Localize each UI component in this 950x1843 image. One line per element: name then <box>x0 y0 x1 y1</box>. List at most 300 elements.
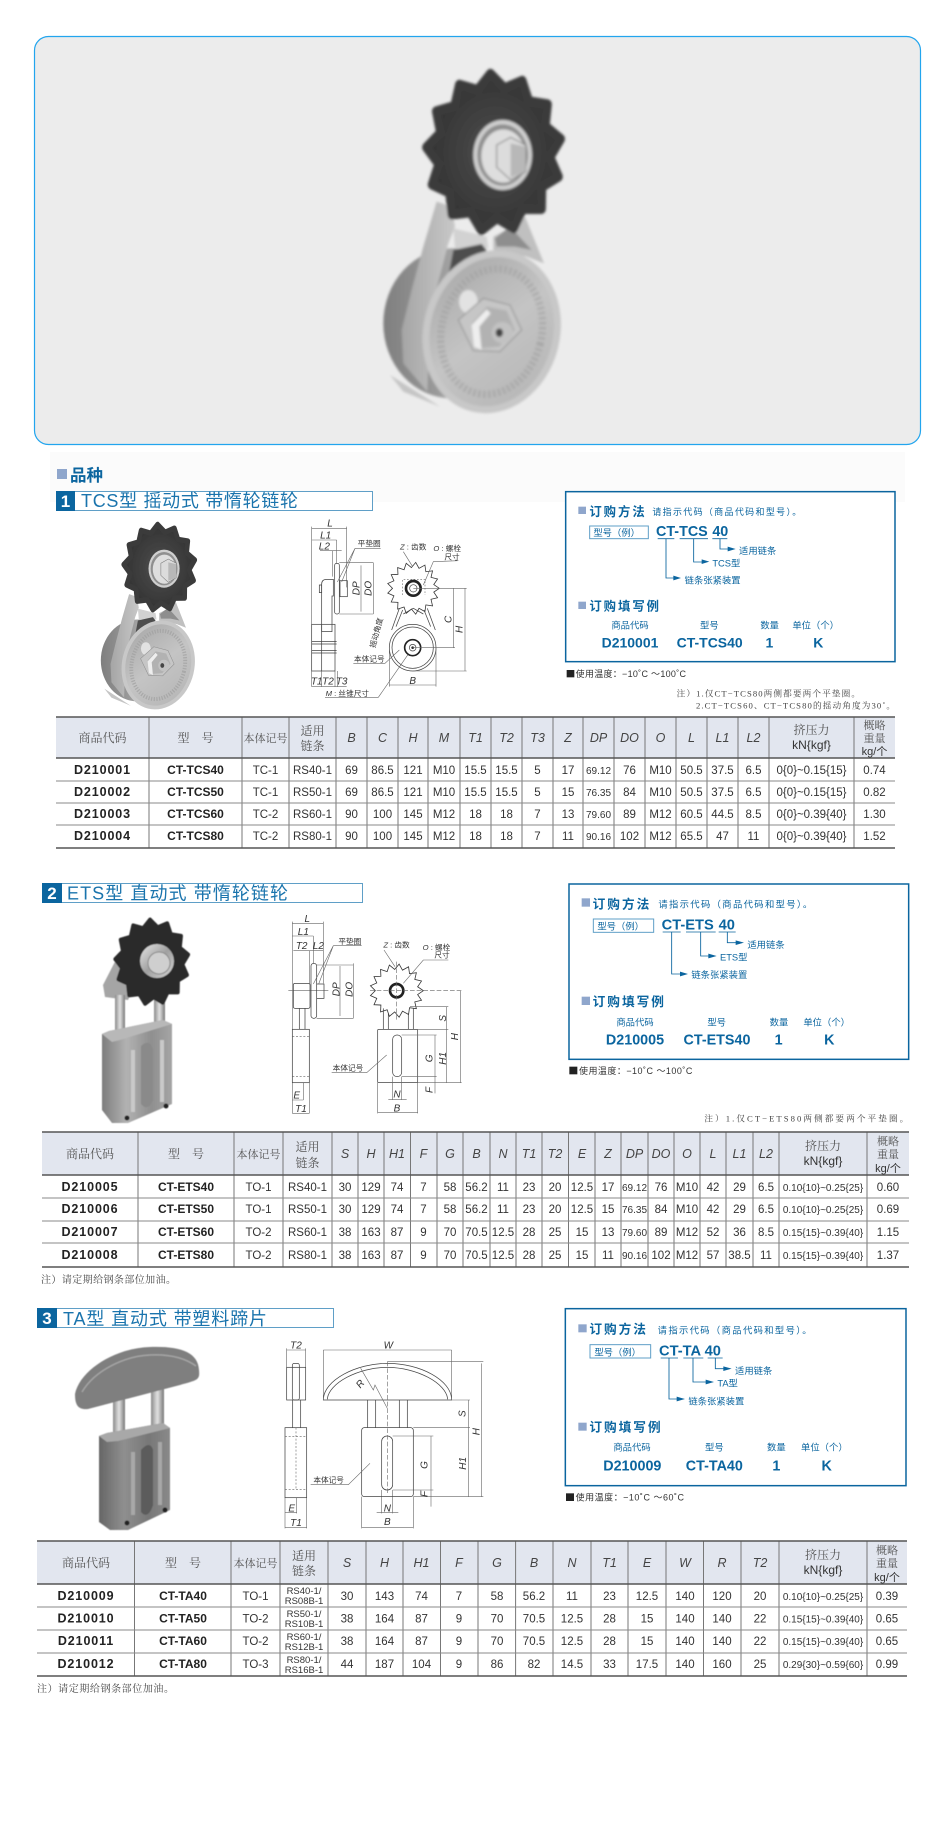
table rows: 25 <box>549 1227 561 1239</box>
table rows: 86.5 <box>371 765 394 777</box>
table rows: TO-1 <box>246 1182 272 1194</box>
table header: H <box>380 1556 390 1570</box>
table rows: TC-2 <box>253 831 278 843</box>
table rows: M12 <box>433 809 455 821</box>
table rows: 7 <box>456 1591 462 1603</box>
drawing: ETS dimensions: N <box>393 1090 401 1101</box>
panel: TCS ordering: 单位（个） <box>792 620 839 631</box>
table: TA specifications <box>37 1541 907 1676</box>
table rows: 25 <box>549 1250 561 1262</box>
table header: N <box>567 1556 577 1570</box>
table rows: 17 <box>562 765 574 777</box>
table rows: 56.2 <box>465 1204 488 1216</box>
table rows: 74 <box>415 1591 428 1603</box>
table rows: 58 <box>444 1182 456 1194</box>
table header: H1 <box>414 1556 429 1570</box>
table header: 本体记号 <box>244 731 288 745</box>
panel: ETS ordering: 1 <box>775 1032 783 1048</box>
table rows: 42 <box>707 1204 719 1216</box>
table rows: 23 <box>523 1204 535 1216</box>
panel: TA ordering: 型号（例） <box>594 1346 641 1357</box>
table header: T1 <box>602 1556 617 1570</box>
panel: TA ordering: 数量 <box>767 1442 786 1453</box>
table rows: 140 <box>675 1614 695 1626</box>
panel: TA ordering: CT-TA <box>659 1344 701 1360</box>
table header: B <box>472 1147 481 1161</box>
table rows: 8.5 <box>746 809 762 821</box>
drawing: ETS dimensions: T2 <box>296 941 308 952</box>
panel: ETS ordering: 订购方法 <box>593 896 651 911</box>
table header: C <box>378 731 388 745</box>
panel: ETS ordering: 型号 <box>707 1017 726 1027</box>
table rows: 44.5 <box>711 809 734 821</box>
table rows: 12.5 <box>636 1591 658 1603</box>
table rows: 11 <box>562 831 574 843</box>
table rows: 28 <box>523 1250 535 1262</box>
panel: ETS ordering: CT-ETS <box>662 918 714 934</box>
drawing: TCS dimensions: L1 <box>320 531 331 542</box>
table rows: 76 <box>655 1182 667 1194</box>
table rows: RS12B-1 <box>285 1642 323 1653</box>
table rows: 13 <box>562 809 574 821</box>
drawing: ETS dimensions: 尺寸 <box>434 950 450 960</box>
table rows: M10 <box>676 1204 698 1216</box>
drawing: ETS dimensions: E <box>293 1091 300 1102</box>
panel: TA ordering: 请指示代码（商品代码和型号）。 <box>658 1324 813 1335</box>
table rows: 7 <box>534 809 541 821</box>
table rows: 160 <box>712 1659 732 1671</box>
table rows: M10 <box>676 1182 698 1194</box>
table rows: 15.5 <box>495 765 518 777</box>
panel: TCS ordering: 1 <box>765 634 773 650</box>
table header: T2 <box>548 1147 562 1161</box>
table rows: 70 <box>491 1636 503 1648</box>
table rows: 1.37 <box>877 1250 899 1262</box>
table rows: 44 <box>341 1659 354 1671</box>
table rows: 87 <box>415 1614 428 1626</box>
table rows: CT-TCS80 <box>167 829 224 843</box>
table header: 链条 <box>300 739 325 753</box>
table header: Z <box>563 731 572 745</box>
table: TCS specifications <box>56 717 895 848</box>
table rows <box>61 1180 899 1262</box>
table rows: RS50-1 <box>293 787 332 799</box>
table header: S <box>341 1147 350 1161</box>
table rows: 42 <box>707 1182 719 1194</box>
table rows: 1.30 <box>863 809 886 821</box>
panel: ETS ordering: CT-ETS40 <box>684 1032 750 1048</box>
table rows: 163 <box>361 1227 381 1239</box>
table rows: 56.2 <box>465 1182 488 1194</box>
table rows: CT-ETS60 <box>158 1225 214 1239</box>
table header: O <box>682 1147 692 1161</box>
table rows: 84 <box>655 1204 668 1216</box>
table rows: 0.15{15}~0.39{40} <box>783 1228 864 1239</box>
drawing: ETS dimensions: T1 <box>295 1104 307 1115</box>
panel: TA ordering: 使用温度：−10˚C ～60˚C <box>576 1492 684 1503</box>
table rows: 8.5 <box>758 1227 774 1239</box>
table rows: TC-2 <box>253 809 278 821</box>
table header: T2 <box>753 1556 767 1570</box>
table rows: 76.35 <box>622 1205 647 1216</box>
table rows: 6.5 <box>746 765 762 777</box>
table rows: 90 <box>345 809 358 821</box>
table rows: 30 <box>339 1182 351 1194</box>
table rows: 0.15{15}~0.39{40} <box>783 1637 864 1648</box>
table header: T1 <box>468 731 483 745</box>
section 3 heading: 3 <box>42 1309 52 1328</box>
table rows: 50.5 <box>680 765 703 777</box>
table rows: 0{0}~0.15{15} <box>776 765 847 777</box>
table rows: 38 <box>341 1614 353 1626</box>
table rows: 12.5 <box>571 1182 593 1194</box>
table rows: 7 <box>534 831 541 843</box>
table rows: 28 <box>603 1636 616 1648</box>
table rows: 15 <box>641 1636 653 1648</box>
photo: TCS tensioner large <box>383 62 578 428</box>
drawing: TA dimensions: W <box>384 1341 395 1352</box>
drawing: ETS dimensions: H1 <box>438 1052 449 1065</box>
drawing: TCS dimensions: 摇动角度 <box>367 616 385 649</box>
table rows: 102 <box>651 1250 671 1262</box>
table header: T1 <box>522 1147 536 1161</box>
table rows: 0{0}~0.39{40} <box>776 809 847 821</box>
drawing: ETS dimensions: 本体记号 <box>333 1063 364 1073</box>
table rows: 17 <box>602 1182 614 1194</box>
table header: 链条 <box>295 1156 320 1170</box>
table rows: 11 <box>760 1250 772 1262</box>
section 3 heading: TA型 直动式 带塑料蹄片 <box>63 1309 267 1329</box>
table rows: M10 <box>433 765 455 777</box>
table rows: 15 <box>576 1227 588 1239</box>
table rows: 9 <box>456 1636 462 1648</box>
panel: TCS ordering: K <box>813 634 823 650</box>
panel: TCS ordering: D210001 <box>602 634 659 650</box>
drawing: ETS dimensions <box>288 914 463 1115</box>
table rows: 74 <box>391 1182 404 1194</box>
panel: TA ordering: 商品代码 <box>613 1442 651 1453</box>
drawing: ETS dimensions: Z : 齿数 <box>382 940 410 950</box>
table header: 概略 <box>876 1543 898 1557</box>
table rows: M12 <box>649 809 672 821</box>
table rows: 69 <box>345 787 358 799</box>
table rows: 65.5 <box>680 831 703 843</box>
drawing: TCS dimensions: L2 <box>319 541 330 552</box>
table header: L <box>710 1147 717 1161</box>
table rows: 129 <box>361 1182 381 1194</box>
table rows: D210009 <box>57 1589 115 1603</box>
table header: B <box>530 1556 538 1570</box>
table header: 重量 <box>877 1147 899 1161</box>
table rows: 38 <box>339 1250 351 1262</box>
table rows: 23 <box>523 1182 535 1194</box>
table rows: 104 <box>412 1659 432 1671</box>
table header: L1 <box>716 731 729 745</box>
table rows: 18 <box>469 809 482 821</box>
table rows: 6.5 <box>758 1182 774 1194</box>
panel: TCS ordering: 适用链条 <box>739 545 776 556</box>
table rows: 37.5 <box>711 765 734 777</box>
table rows: RS60-1/ <box>287 1632 322 1643</box>
panel: TCS ordering: 注）1.仅CT−TCS80两侧都要两个平垫圈。 <box>677 688 860 699</box>
drawing: TCS dimensions: T2 <box>322 677 334 688</box>
table rows: 121 <box>403 787 423 799</box>
section 1 heading <box>56 491 372 511</box>
table rows: D210010 <box>57 1612 115 1626</box>
drawing: ETS dimensions: F <box>425 1086 436 1093</box>
panel: hero product photo <box>34 36 920 444</box>
table header: L2 <box>747 731 760 745</box>
table rows: 69.12 <box>622 1183 647 1194</box>
table header: kg/个 <box>875 1162 901 1175</box>
table rows: 58 <box>444 1204 456 1216</box>
table rows: 70.5 <box>523 1636 545 1648</box>
table rows: D210003 <box>74 807 131 821</box>
table header <box>66 1134 901 1175</box>
table header: 概略 <box>877 1134 899 1148</box>
table header: L <box>688 731 695 745</box>
table rows: 56.2 <box>523 1591 545 1603</box>
table rows: 100 <box>373 831 392 843</box>
panel: ETS ordering: ETS型 <box>720 952 747 962</box>
drawing: TA dimensions: H1 <box>458 1457 469 1470</box>
panel: TA ordering: TA型 <box>717 1378 738 1388</box>
table rows: D210005 <box>61 1180 119 1194</box>
table rows: 0.15{15}~0.39{40} <box>783 1251 864 1262</box>
table rows: 0.10{10}~0.25{25} <box>783 1205 864 1216</box>
drawing: TCS dimensions: 平垫圈 <box>358 538 381 548</box>
table rows: RS80-1/ <box>287 1655 322 1666</box>
table rows: 1.15 <box>877 1227 899 1239</box>
table rows: D210002 <box>74 785 131 799</box>
table rows: 90 <box>345 831 358 843</box>
table header: M <box>439 731 450 745</box>
table header: 概略 <box>864 718 886 732</box>
drawing: TCS dimensions: DP <box>351 581 362 595</box>
table rows: CT-TA80 <box>159 1657 207 1671</box>
table rows: 79.60 <box>622 1228 647 1239</box>
table header: kg/个 <box>862 745 887 758</box>
table rows: CT-ETS80 <box>158 1248 214 1262</box>
panel: TCS ordering: CT-TCS40 <box>677 634 743 650</box>
drawing: ETS dimensions: H <box>450 1032 461 1040</box>
drawing: TCS dimensions: T3 <box>336 677 348 688</box>
table rows: 121 <box>403 765 423 777</box>
panel: TCS ordering: 请指示代码（商品代码和型号）。 <box>652 506 803 517</box>
table rows: 13 <box>602 1227 614 1239</box>
panel: ETS ordering: 链条张紧装置 <box>691 969 747 980</box>
table header: 重量 <box>864 731 886 745</box>
table rows: 70 <box>444 1227 456 1239</box>
panel: TCS ordering: TCS型 <box>712 558 740 568</box>
drawing: TA dimensions: R <box>354 1378 367 1391</box>
note: ETS lubrication: 注）请定期给钢条部位加油。 <box>41 1273 176 1286</box>
panel: ETS ordering: 使用温度：−10˚C ～100˚C <box>579 1065 693 1076</box>
table header: T3 <box>530 731 545 745</box>
table rows: D210001 <box>74 763 131 777</box>
table rows: 15 <box>576 1250 588 1262</box>
table rows: 140 <box>675 1659 695 1671</box>
panel: ETS ordering: K <box>824 1032 835 1048</box>
table rows: D210008 <box>61 1248 119 1262</box>
table header: kN{kgf} <box>792 738 831 752</box>
drawing: TCS dimensions: H <box>455 625 466 633</box>
table rows: 84 <box>623 787 636 799</box>
table rows: 1.52 <box>863 831 886 843</box>
table header: Z <box>603 1147 612 1161</box>
table rows: 0.74 <box>863 765 886 777</box>
table rows: 57 <box>707 1250 719 1262</box>
table header: 挤压力 <box>805 1547 841 1562</box>
panel: TA ordering <box>565 1309 906 1503</box>
table rows: 33 <box>603 1659 616 1671</box>
table rows: 87 <box>391 1227 403 1239</box>
table rows: 12.5 <box>492 1250 514 1262</box>
drawing: ETS dimensions: G <box>425 1054 436 1062</box>
table rows: 15 <box>602 1204 614 1216</box>
note: TA lubrication: 注）请定期给钢条部位加油。 <box>37 1682 174 1695</box>
table rows: 58 <box>491 1591 503 1603</box>
table rows: 50.5 <box>680 787 703 799</box>
table header: B <box>347 731 356 745</box>
drawing: TCS dimensions: 尺寸 <box>444 551 460 561</box>
table rows: CT-TA40 <box>159 1589 207 1603</box>
table rows: 82 <box>528 1659 540 1671</box>
table rows: 0{0}~0.15{15} <box>776 787 847 799</box>
table rows: 89 <box>623 809 636 821</box>
table rows: CT-ETS40 <box>158 1180 214 1194</box>
table rows: 0{0}~0.39{40} <box>776 831 847 843</box>
table rows: 5 <box>534 787 541 799</box>
table rows: 140 <box>675 1591 695 1603</box>
table rows: 0.60 <box>877 1182 899 1194</box>
table header: 适用 <box>295 1140 320 1154</box>
drawing: TA dimensions: T1 <box>290 1518 302 1529</box>
drawing: ETS dimensions: L <box>305 914 310 925</box>
table rows: 6.5 <box>758 1204 774 1216</box>
table rows: D210012 <box>57 1657 115 1671</box>
table header: G <box>445 1147 455 1161</box>
drawing: ETS dimensions: DO <box>345 982 356 997</box>
drawing: TA dimensions: B <box>384 1517 391 1528</box>
table header: 本体记号 <box>236 1147 280 1161</box>
table header: 链条 <box>292 1564 316 1578</box>
table rows: TO-2 <box>242 1614 268 1626</box>
table header: 商品代码 <box>78 730 127 745</box>
table rows: 120 <box>712 1591 732 1603</box>
panel: TA ordering: 单位（个） <box>801 1442 848 1453</box>
table header: DO <box>620 731 639 745</box>
table rows: 9 <box>456 1659 462 1671</box>
table rows: 102 <box>620 831 639 843</box>
table rows: CT-TCS50 <box>167 785 224 799</box>
table rows: 0.15{15}~0.39{40} <box>783 1614 864 1626</box>
table rows: RS40-1/ <box>287 1586 322 1597</box>
table rows: D210004 <box>74 829 131 843</box>
table rows: CT-TCS60 <box>167 807 224 821</box>
table rows: 87 <box>415 1636 428 1648</box>
table rows: 140 <box>675 1636 695 1648</box>
drawing: TCS dimensions: T1 <box>311 677 322 688</box>
panel: TCS ordering: 商品代码 <box>611 620 649 631</box>
table rows: 70.5 <box>465 1250 488 1262</box>
panel: ETS ordering: 单位（个） <box>803 1016 850 1027</box>
drawing: TA dimensions <box>285 1341 483 1529</box>
table rows: 9 <box>420 1227 427 1239</box>
table header: DO <box>652 1147 671 1161</box>
table header: 型 号 <box>165 1555 201 1570</box>
table rows: RS80-1 <box>293 831 332 843</box>
drawing: TCS dimensions: B <box>409 676 416 687</box>
drawing: TA dimensions: H <box>471 1427 482 1435</box>
panel: ETS ordering: 商品代码 <box>616 1016 654 1027</box>
table rows: M12 <box>649 831 672 843</box>
table rows: 30 <box>341 1591 353 1603</box>
table rows: RS80-1 <box>288 1250 327 1262</box>
table rows: 0.10{10}~0.25{25} <box>783 1183 864 1194</box>
table rows: 70.5 <box>523 1614 545 1626</box>
table rows: 5 <box>534 765 541 777</box>
panel: TCS ordering: 链条张紧装置 <box>685 574 741 585</box>
heading: varieties: 品种 <box>70 466 103 485</box>
table rows: 74 <box>391 1204 404 1216</box>
panel: ETS ordering: 数量 <box>770 1016 788 1027</box>
table rows: 38.5 <box>728 1250 751 1262</box>
table rows: 25 <box>754 1659 766 1671</box>
table rows: M12 <box>676 1250 698 1262</box>
table rows: 23 <box>603 1591 616 1603</box>
table rows <box>57 1586 898 1676</box>
table rows: RS16B-1 <box>285 1665 323 1676</box>
table rows: 90.16 <box>622 1251 647 1262</box>
panel: TA ordering: CT-TA40 <box>686 1459 743 1475</box>
table rows: 0.69 <box>877 1204 899 1216</box>
table rows: 9 <box>420 1250 427 1262</box>
drawing: ETS dimensions: S <box>438 1015 449 1022</box>
table rows: 163 <box>361 1250 381 1262</box>
table header <box>78 718 887 758</box>
table rows: 22 <box>754 1636 766 1648</box>
panel: TCS ordering: 订购填写例 <box>589 599 661 614</box>
table header: 商品代码 <box>66 1146 114 1161</box>
panel: TCS ordering: 订购方法 <box>589 504 647 519</box>
table rows: 143 <box>375 1591 394 1603</box>
photo: TA tensioner <box>75 1347 199 1530</box>
table rows: CT-TCS40 <box>167 763 224 777</box>
table header: kN{kgf} <box>804 1563 842 1577</box>
panel: TA ordering: D210009 <box>603 1459 661 1475</box>
table rows: TO-2 <box>246 1250 272 1262</box>
table rows: 9 <box>456 1614 462 1626</box>
table rows: 37.5 <box>711 787 734 799</box>
table rows: 0.10{10}~0.25{25} <box>783 1592 864 1603</box>
table rows: 86.5 <box>371 787 394 799</box>
table rows: 0.65 <box>876 1614 898 1626</box>
table rows: TO-1 <box>246 1204 272 1216</box>
table rows: 60.5 <box>680 809 703 821</box>
table header: kN{kgf} <box>804 1154 842 1168</box>
table rows: CT-TA50 <box>159 1612 207 1626</box>
table rows: M10 <box>433 787 455 799</box>
table rows: 70 <box>491 1614 503 1626</box>
table rows: 7 <box>420 1204 427 1216</box>
table rows: 0.39 <box>876 1591 898 1603</box>
table rows: 29 <box>733 1182 746 1194</box>
panel: TCS ordering: 型号（例） <box>593 527 640 538</box>
table rows: 12.5 <box>561 1614 583 1626</box>
table rows: TO-2 <box>242 1636 268 1648</box>
table rows: TO-3 <box>242 1659 268 1671</box>
